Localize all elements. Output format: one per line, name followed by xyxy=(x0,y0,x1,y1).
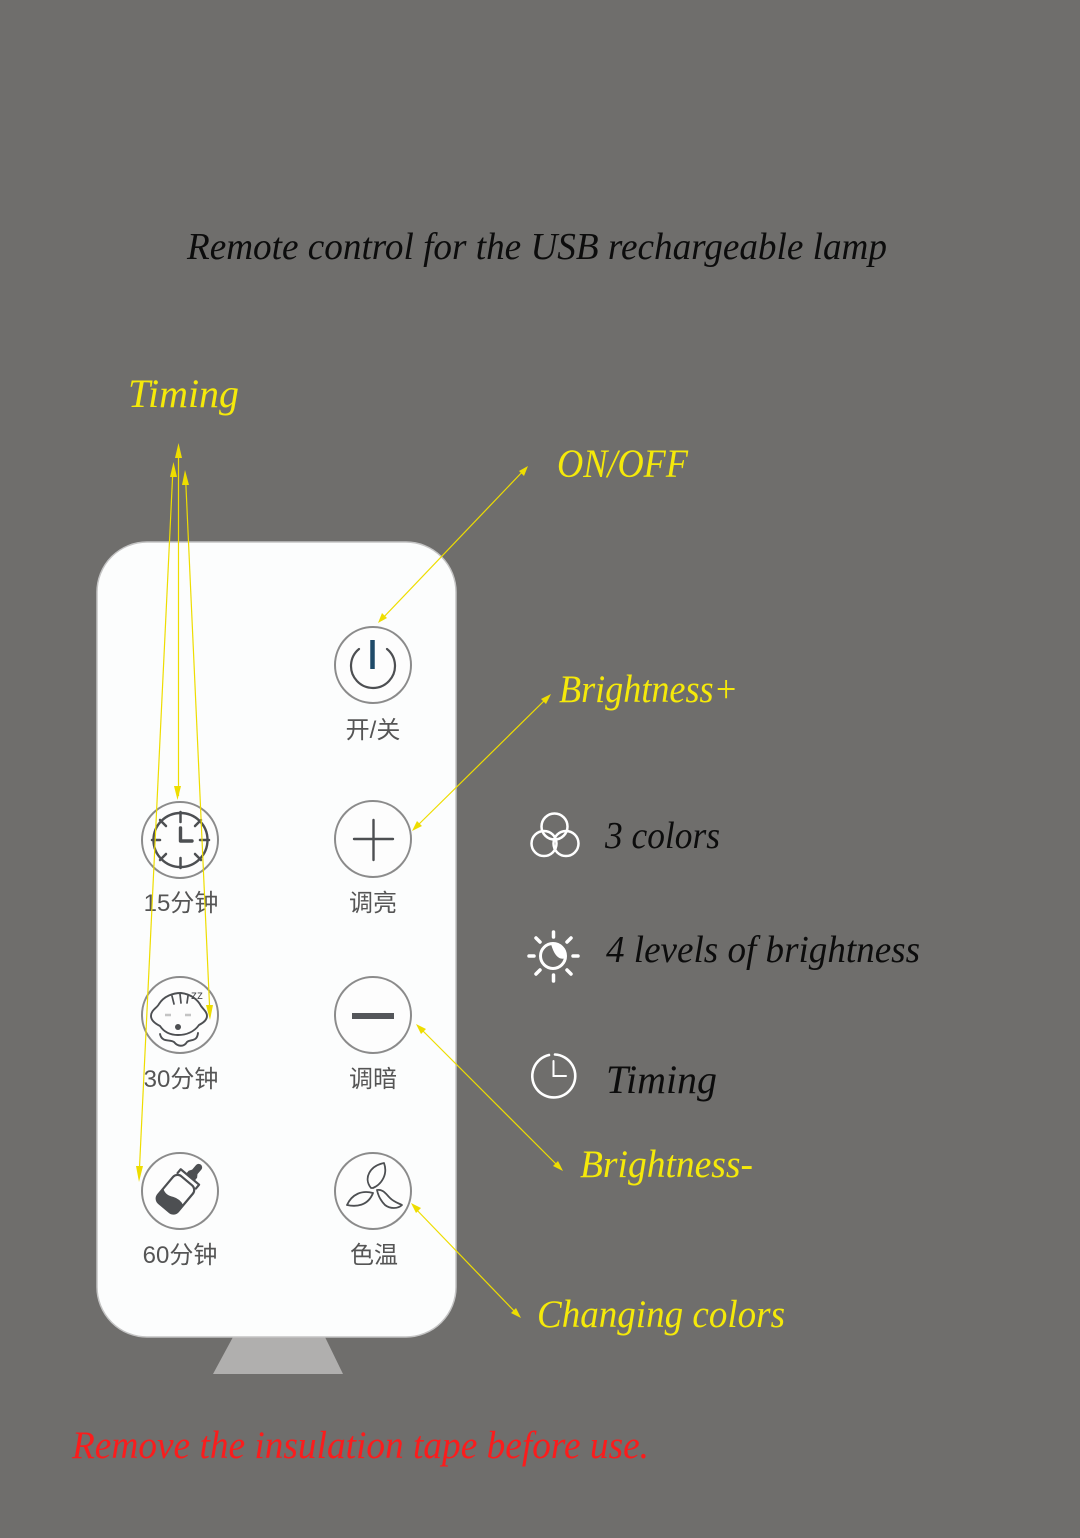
button: brightness up xyxy=(335,801,411,917)
label: Brightness+: Brightness+ xyxy=(559,668,738,711)
button: 60 minutes xyxy=(142,1153,218,1269)
title: Remote control for the USB rechargeable lamp xyxy=(186,226,887,268)
button: 60 minutes: 60分钟 xyxy=(143,1242,217,1269)
button: 15 minutes xyxy=(142,802,218,917)
button: brightness up: 调亮 xyxy=(349,890,397,917)
arrow: Brightness+ xyxy=(412,694,551,831)
button: 15 minutes: 15分钟 xyxy=(144,890,218,917)
label: Timing (top): Timing xyxy=(128,371,239,416)
remote control body xyxy=(97,542,456,1337)
feature: Timing xyxy=(532,1054,717,1102)
arrow: Brightness- xyxy=(416,1024,563,1171)
feature: Timing: Timing xyxy=(606,1057,717,1102)
button: brightness down: 调暗 xyxy=(349,1066,397,1093)
warning note: Remove the insulation tape before use. xyxy=(71,1424,649,1467)
timing arrows xyxy=(136,443,213,1182)
button: 30 minutes: zz xyxy=(191,988,203,1002)
feature: 4 levels of brightness: 4 levels of brightness xyxy=(606,929,920,971)
button: color temperature: 色温 xyxy=(350,1242,398,1269)
icon: clock xyxy=(532,1054,575,1097)
button: power: 开/关 xyxy=(346,717,400,744)
button: brightness down xyxy=(335,977,411,1093)
arrow: ON/OFF xyxy=(378,466,528,623)
label: ON/OFF: ON/OFF xyxy=(557,441,689,486)
button: 30 minutes xyxy=(142,977,218,1093)
arrow: Changing colors xyxy=(411,1203,521,1318)
button: 30 minutes: 30分钟 xyxy=(144,1066,218,1093)
button: power xyxy=(335,627,411,744)
label: Changing colors: Changing colors xyxy=(537,1293,785,1336)
icon: sun brightness xyxy=(529,932,578,981)
feature: 3 colors: 3 colors xyxy=(604,815,720,857)
remote stand xyxy=(213,1337,343,1374)
feature: 4 levels of brightness xyxy=(529,929,920,981)
feature: 3 colors xyxy=(532,814,720,857)
label: Brightness-: Brightness- xyxy=(580,1143,753,1186)
button: color temperature xyxy=(335,1153,411,1269)
icon: three overlapping circles xyxy=(532,814,578,856)
